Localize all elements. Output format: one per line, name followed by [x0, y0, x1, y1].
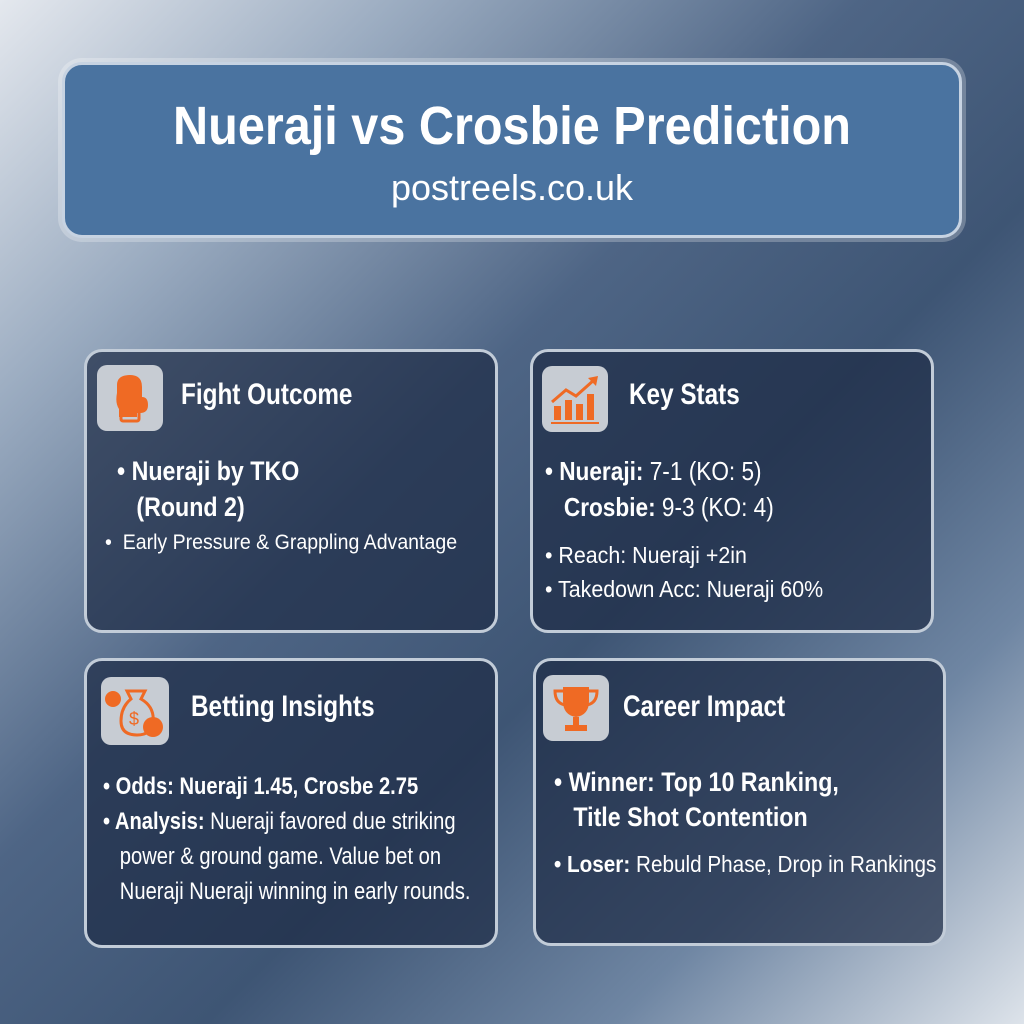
panel: career impact	[533, 658, 946, 946]
body: • Odds: Nueraji 1.45, Crosbe 2.75	[103, 773, 418, 800]
heading: Fight Outcome	[181, 378, 352, 411]
bullets: Title Shot Contention	[573, 802, 808, 832]
panel: fight outcome: • Early Pressure & Grappling Advantage	[105, 531, 457, 554]
heading: Key Stats	[629, 378, 740, 411]
icon: trophy	[543, 675, 609, 741]
icon: chart	[542, 366, 608, 432]
body	[103, 773, 471, 905]
icon: money bag: $	[129, 709, 139, 729]
stats: • Nueraji: 7-1 (KO: 5)	[545, 456, 762, 486]
body: power & ground game. Value bet on	[120, 843, 441, 870]
panel: betting insights	[84, 658, 498, 948]
panel: key stats: • Takedown Acc: Nueraji 60%	[545, 576, 823, 602]
title banner	[62, 62, 962, 238]
heading: Nueraji vs Crosbie Prediction	[173, 96, 851, 156]
icon: boxing glove	[97, 365, 163, 431]
bullets: • Nueraji by TKO	[117, 456, 299, 486]
panel: key stats: • Reach: Nueraji +2in	[545, 542, 747, 568]
heading: Betting Insights	[191, 690, 375, 723]
panel: career impact: • Loser: Rebuld Phase, Drop in Rankings	[554, 851, 936, 877]
body: Nueraji Nueraji winning in early rounds.	[120, 878, 471, 905]
stats	[545, 456, 774, 522]
heading: Career Impact	[623, 690, 785, 723]
body: • Analysis: Nueraji favored due striking	[103, 808, 456, 835]
panel: key stats	[530, 349, 934, 633]
subtitle: postreels.co.uk	[391, 167, 633, 208]
panel: fight outcome	[84, 349, 498, 633]
icon: money bag	[101, 677, 169, 745]
bullets: • Winner: Top 10 Ranking,	[554, 767, 839, 797]
stats: Crosbie: 9-3 (KO: 4)	[564, 492, 774, 522]
bullets: (Round 2)	[136, 492, 245, 522]
bullets	[117, 456, 299, 522]
bullets	[554, 767, 839, 832]
